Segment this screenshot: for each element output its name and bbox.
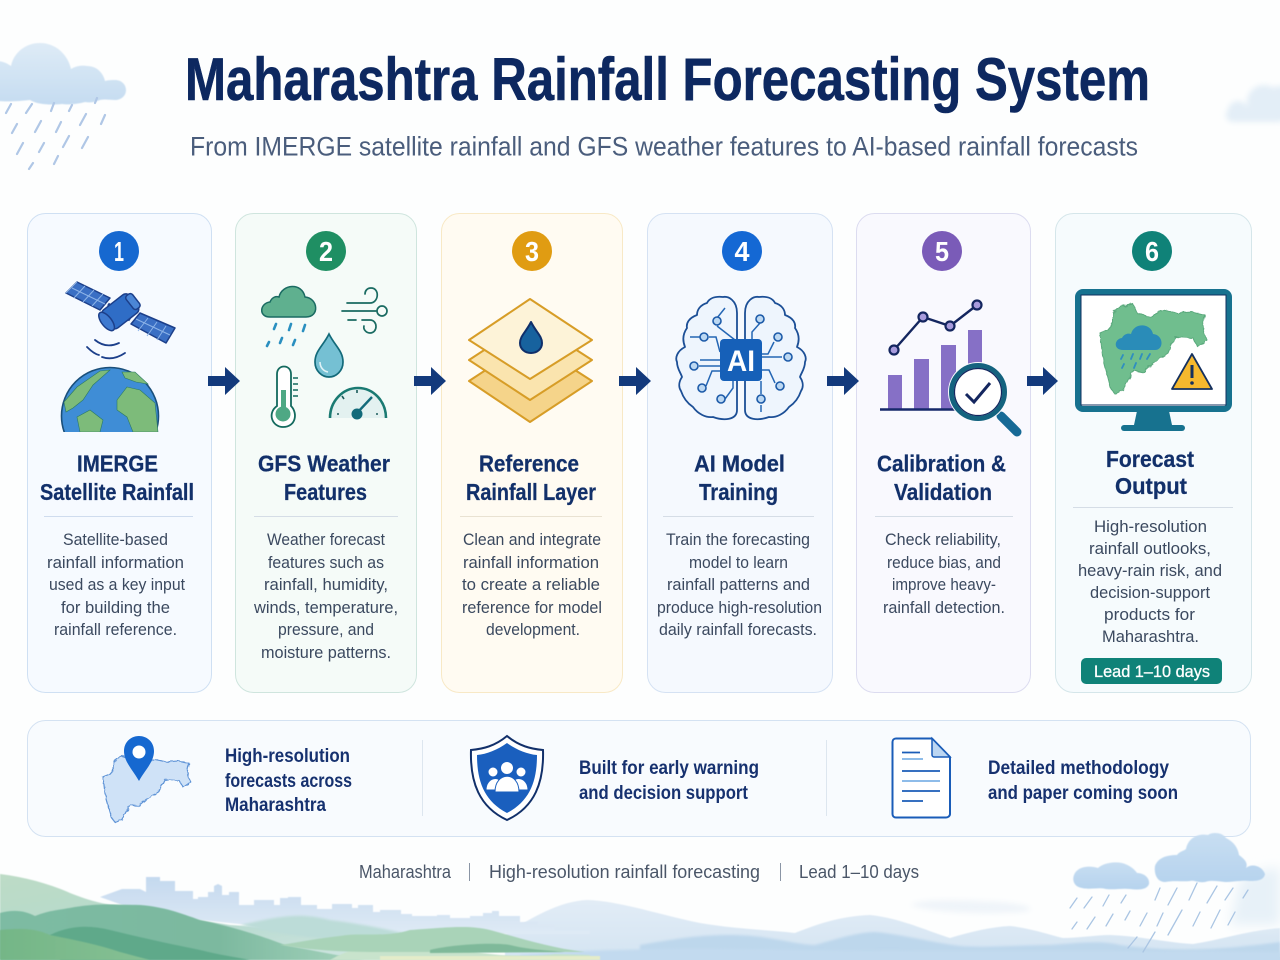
arrow 3 to 4 bbox=[619, 367, 651, 395]
heading: Reference bbox=[479, 450, 579, 476]
text: early warning: and decision support bbox=[579, 783, 749, 804]
text: methodology bbox=[988, 758, 1178, 804]
icon: satellite and earth bbox=[60, 281, 176, 432]
arrow 4 to 5 bbox=[827, 367, 859, 395]
description: moisture patterns. bbox=[261, 644, 391, 662]
description bbox=[1078, 518, 1222, 646]
number badge 5: 5 bbox=[935, 236, 949, 267]
description: rainfall information bbox=[47, 554, 184, 572]
description: reduce bias, and bbox=[887, 554, 1001, 572]
description: winds, temperature, bbox=[253, 599, 398, 617]
text: early warning bbox=[579, 758, 759, 804]
description: Maharashtra. bbox=[1102, 628, 1199, 646]
description: High-resolution bbox=[1094, 518, 1207, 536]
description bbox=[657, 531, 822, 639]
description: rainfall information bbox=[463, 554, 599, 572]
icon: shield with people bbox=[471, 736, 543, 820]
heading bbox=[258, 450, 390, 505]
description: produce high-resolution bbox=[657, 599, 822, 617]
panel: step 6 forecast output bbox=[1056, 214, 1252, 692]
description: pressure, and bbox=[278, 621, 374, 639]
arrow 2 to 3 bbox=[414, 367, 446, 395]
description: to create a reliable bbox=[462, 576, 600, 594]
description: rainfall, humidity, bbox=[264, 576, 388, 594]
footer tagline: High-resolution rainfall forecasting bbox=[489, 862, 760, 882]
number badge 1 bbox=[99, 231, 139, 271]
footer tagline bbox=[359, 862, 919, 882]
description: Clean and integrate bbox=[463, 531, 601, 549]
right side haze bbox=[1230, 868, 1280, 925]
description: Check reliability, bbox=[885, 531, 1001, 549]
badge: lead time: Lead 1–10 days bbox=[1094, 662, 1210, 681]
heading: Training bbox=[699, 479, 778, 505]
heading: Forecast bbox=[1106, 446, 1194, 472]
description: Weather forecast bbox=[267, 531, 385, 549]
description: Satellite-based bbox=[63, 531, 168, 549]
heading: IMERGE bbox=[77, 450, 158, 476]
arrow 5 to 6 bbox=[1027, 367, 1058, 395]
number badge 4 bbox=[722, 231, 762, 271]
number badge 6: 6 bbox=[1145, 236, 1159, 267]
number badge 2: 2 bbox=[319, 236, 333, 267]
description: rainfall outlooks, bbox=[1089, 540, 1211, 558]
description: model to learn bbox=[689, 554, 788, 572]
description bbox=[253, 531, 398, 662]
description: features such as bbox=[268, 554, 384, 572]
green hills bbox=[0, 874, 600, 960]
icon: Maharashtra map with pin bbox=[103, 736, 191, 822]
panel: step 3 reference rainfall layer bbox=[442, 214, 622, 692]
number badge 4: 4 bbox=[734, 236, 750, 267]
icon: AI brain: AI bbox=[727, 345, 755, 378]
description: daily rainfall forecasts. bbox=[659, 621, 817, 639]
number badge 1: 1 bbox=[114, 236, 124, 267]
heading: Features bbox=[284, 479, 367, 505]
decoration: landscape bbox=[0, 868, 1280, 960]
heading: GFS Weather bbox=[258, 450, 390, 476]
heading bbox=[40, 450, 194, 505]
number badge 3 bbox=[512, 231, 552, 271]
description: Train the forecasting bbox=[666, 531, 810, 549]
text: methodology: Detailed methodology bbox=[988, 758, 1169, 779]
text: early warning: Built for early warning bbox=[579, 758, 759, 779]
icon: stacked layers with drop bbox=[469, 299, 592, 422]
description: decision-support bbox=[1090, 584, 1210, 602]
number badge 5 bbox=[922, 231, 962, 271]
heading bbox=[1106, 446, 1194, 499]
heading: Validation bbox=[894, 479, 992, 505]
text: high-resolution forecasts: forecasts across bbox=[225, 771, 352, 792]
description: products for bbox=[1104, 606, 1196, 624]
text: high-resolution forecasts: Maharashtra bbox=[225, 795, 326, 816]
arrow 1 to 2 bbox=[208, 367, 240, 395]
description: rainfall patterns and bbox=[667, 576, 810, 594]
panel: step 2 GFS weather features bbox=[236, 214, 416, 692]
heading bbox=[694, 450, 785, 505]
heading: Satellite Rainfall bbox=[40, 479, 194, 505]
description: rainfall reference. bbox=[54, 621, 177, 639]
icon: AI brain bbox=[676, 297, 806, 419]
skyline bbox=[100, 877, 590, 934]
panel: step 1 IMERGE satellite rainfall bbox=[28, 214, 212, 692]
description: for building the bbox=[61, 599, 170, 617]
description: heavy-rain risk, and bbox=[1078, 562, 1222, 580]
footer tagline: Maharashtra bbox=[359, 862, 452, 882]
heading: Calibration & bbox=[877, 450, 1006, 476]
icon: monitor with forecast map bbox=[1078, 292, 1229, 431]
panel: key highlights bbox=[28, 720, 1250, 836]
panel: step 4 AI model training bbox=[648, 214, 832, 692]
mist patch bbox=[910, 900, 1030, 913]
number badge 2 bbox=[306, 231, 346, 271]
distant blue hills bbox=[505, 900, 1280, 960]
footer tagline: Lead 1–10 days bbox=[799, 862, 919, 882]
description bbox=[462, 531, 602, 639]
number badge 6 bbox=[1132, 231, 1172, 271]
icon: chart with magnifier bbox=[880, 300, 1017, 432]
heading bbox=[877, 450, 1006, 505]
icon: weather features bbox=[262, 286, 387, 427]
description bbox=[883, 531, 1005, 617]
heading: AI Model bbox=[694, 450, 785, 476]
heading bbox=[466, 450, 596, 505]
decoration: top left rain cloud bbox=[0, 43, 126, 169]
heading: Output bbox=[1115, 473, 1187, 499]
description: rainfall detection. bbox=[883, 599, 1005, 617]
description: development. bbox=[486, 621, 580, 639]
badge: lead time bbox=[1081, 658, 1222, 684]
decoration: bottom right rain clouds bbox=[1070, 833, 1265, 952]
text: high-resolution forecasts: High-resolution bbox=[225, 746, 350, 767]
text: high-resolution forecasts bbox=[225, 746, 352, 816]
icon: document bbox=[892, 738, 950, 818]
text: methodology: and paper coming soon bbox=[988, 783, 1178, 804]
description bbox=[47, 531, 185, 639]
subtitle: From IMERGE satellite rainfall and GFS weather features to AI-based rainfall forecasts bbox=[190, 132, 1138, 162]
decoration: top right cloud bbox=[1226, 85, 1280, 122]
description: reference for model bbox=[462, 599, 602, 617]
description: improve heavy- bbox=[892, 576, 996, 594]
panel: step 5 calibration and validation bbox=[856, 214, 1030, 692]
heading: Rainfall Layer bbox=[466, 479, 596, 505]
number badge 3: 3 bbox=[525, 236, 539, 267]
description: used as a key input bbox=[49, 576, 185, 594]
